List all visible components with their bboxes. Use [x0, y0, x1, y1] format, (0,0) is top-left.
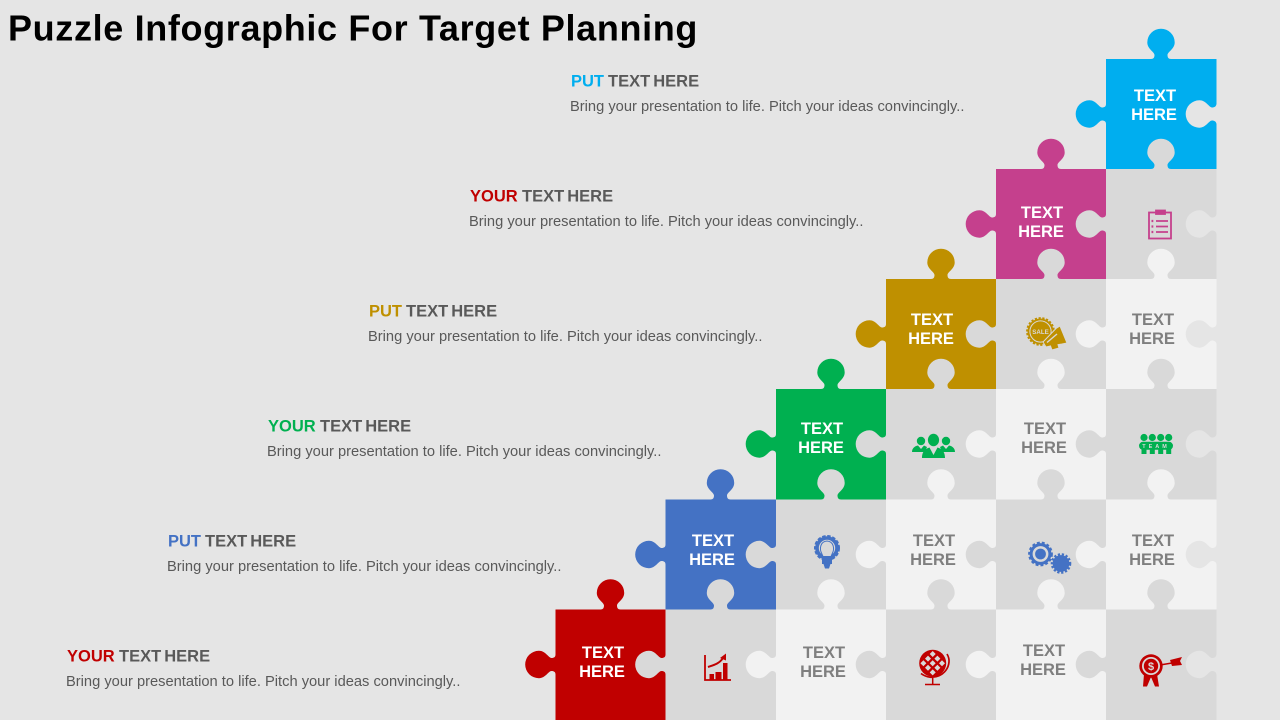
puzzle piece: globe icon [856, 579, 996, 720]
label block: row 5 magenta: TEXT HERE [522, 188, 613, 206]
icon: two gears [1030, 543, 1070, 572]
icon: light bulb in gear [815, 536, 839, 568]
puzzle piece: grey text: TEXT [1132, 311, 1174, 329]
puzzle piece: grey text: HERE [1129, 551, 1175, 569]
puzzle piece: green [746, 359, 886, 500]
puzzle piece: red [525, 579, 666, 720]
label block: row 1 red: YOUR [67, 648, 115, 666]
label block: row 3 green: YOUR [268, 418, 316, 436]
puzzle piece: clipboard icon [1076, 139, 1216, 280]
label block: row 5 magenta: YOUR [470, 188, 518, 206]
puzzle piece: grey text [1076, 469, 1216, 610]
puzzle piece: grey text: TEXT [1023, 642, 1065, 660]
label block: row 3 green [267, 418, 661, 460]
puzzle piece: magenta [966, 139, 1106, 280]
puzzle piece: grey text: TEXT [913, 532, 955, 550]
puzzle piece: grey text: HERE [1021, 439, 1067, 457]
puzzle piece: grey text [966, 359, 1106, 500]
puzzle piece: bulb icon [746, 469, 886, 610]
puzzle piece: team icon [856, 359, 996, 500]
puzzle piece: red: HERE [579, 663, 625, 681]
icon: three people [912, 434, 955, 458]
label block: row 6 cyan [570, 72, 964, 115]
label block: row 5 magenta [469, 188, 863, 230]
puzzle piece: grey text: TEXT [1132, 532, 1174, 550]
icon: growth bar chart [705, 654, 731, 680]
label block: row 3 green: Bring your presentation to life. Pitch your ideas convincingly.. [267, 444, 661, 460]
puzzle piece: grey text [856, 469, 996, 610]
puzzle piece: magenta: HERE [1018, 223, 1064, 241]
label block: row 4 gold [368, 302, 762, 345]
icon: dollar target with dart: $ [1148, 661, 1154, 673]
icon: clipboard [1149, 210, 1171, 238]
puzzle piece: gears icon [966, 469, 1106, 610]
puzzle piece: grey text: TEXT [803, 644, 845, 662]
icon: four people with team band: TEAM [1142, 444, 1170, 450]
puzzle piece: red: TEXT [582, 644, 624, 662]
puzzle piece: blue: TEXT [692, 532, 734, 550]
label block: row 2 blue [167, 532, 561, 575]
label block: row 6 cyan: Bring your presentation to life. Pitch your ideas convincingly.. [570, 99, 964, 115]
puzzle piece: grey text [746, 579, 886, 720]
label block: row 1 red: TEXT HERE [119, 648, 210, 666]
puzzle piece: target icon [1076, 579, 1216, 720]
right edge notches [1186, 100, 1216, 678]
puzzle piece: magenta: TEXT [1021, 204, 1063, 222]
puzzle piece: grey text: HERE [800, 663, 846, 681]
label block: row 4 gold: PUT [369, 302, 402, 320]
puzzle piece: cyan: TEXT [1134, 87, 1176, 105]
puzzle piece: gold: HERE [908, 330, 954, 348]
puzzle piece: blue: HERE [689, 551, 735, 569]
label block: row 3 green: TEXT HERE [320, 418, 411, 436]
puzzle piece: grey text: HERE [910, 551, 956, 569]
icon: four people with team band [1139, 434, 1173, 454]
icon: dollar target with dart [1139, 654, 1182, 686]
label block: row 6 cyan: TEXT HERE [608, 72, 699, 90]
label block: row 2 blue: Bring your presentation to life. Pitch your ideas convincingly.. [167, 559, 561, 575]
puzzle piece: grey text: HERE [1020, 661, 1066, 679]
label block: row 5 magenta: Bring your presentation to life. Pitch your ideas convincingly.. [469, 214, 863, 230]
puzzle piece: grey text: HERE [1129, 330, 1175, 348]
puzzle piece: green: HERE [798, 439, 844, 457]
puzzle piece: grey text [966, 579, 1106, 720]
label block: row 2 blue: PUT [168, 532, 201, 550]
puzzle piece: grey text: TEXT [1024, 420, 1066, 438]
puzzle piece: gold [856, 249, 996, 390]
puzzle piece: grey text [1076, 249, 1216, 390]
label block: row 1 red [66, 648, 460, 690]
label block: row 4 gold: Bring your presentation to life. Pitch your ideas convincingly.. [368, 329, 762, 345]
icon: sale badge with megaphone [1027, 318, 1067, 350]
puzzle piece: team banner icon [1076, 359, 1216, 500]
label block: row 2 blue: TEXT HERE [205, 532, 296, 550]
puzzle piece: gold: TEXT [911, 311, 953, 329]
puzzle piece: cyan: HERE [1131, 106, 1177, 124]
icon: sale badge with megaphone: SALE [1032, 329, 1049, 336]
puzzle piece: green: TEXT [801, 420, 843, 438]
label block: row 6 cyan: PUT [571, 72, 604, 90]
icon: globe on stand [919, 650, 949, 684]
puzzle piece: blue [635, 469, 776, 610]
title: Puzzle Infographic For Target Planning [8, 8, 698, 48]
puzzle piece: chart icon [635, 579, 776, 720]
puzzle piece: sale icon [966, 249, 1106, 390]
puzzle piece: cyan [1076, 29, 1216, 169]
label block: row 1 red: Bring your presentation to life. Pitch your ideas convincingly.. [66, 674, 460, 690]
label block: row 4 gold: TEXT HERE [406, 302, 497, 320]
